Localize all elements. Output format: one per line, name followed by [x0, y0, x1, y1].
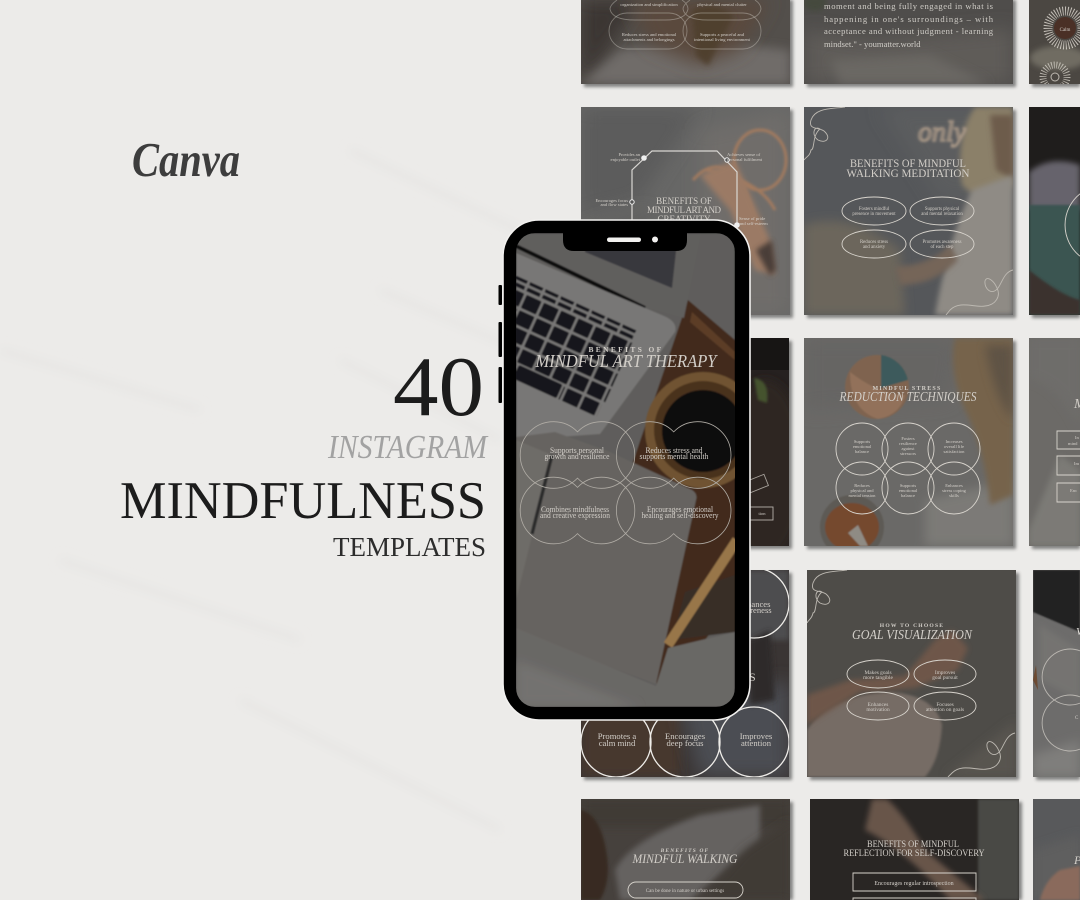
circle grid: physical and: [850, 488, 874, 493]
circle labels: [598, 599, 773, 748]
camera: [652, 236, 658, 242]
circle labels: awareness: [736, 605, 772, 615]
panel: mindful walking template: MINDFUL WALKING: [632, 851, 738, 866]
number 40: 40: [393, 340, 484, 434]
circle grid: against: [901, 446, 915, 451]
template title: BENEFITS OF MINDFUL: [850, 156, 966, 170]
circle grid: Enhances: [945, 483, 963, 488]
quote text: [824, 1, 994, 49]
panel: template row 1 middle: [803, 0, 1016, 87]
coffee mug: [645, 372, 761, 488]
ring: [1065, 194, 1080, 256]
upper pills: [610, 0, 761, 20]
circle labels: calm mind: [599, 738, 636, 748]
hand: [1040, 866, 1080, 900]
title fragment: S: [749, 670, 756, 684]
orange ribbon: [692, 128, 788, 211]
oval grid: [847, 660, 976, 720]
list boxes: mind: [1068, 441, 1078, 446]
arm: [865, 799, 985, 900]
node labels: Provides an: [618, 152, 641, 157]
circle grid: mental tension: [849, 493, 876, 498]
circle grid: resilience: [899, 441, 917, 446]
circle grid: emotional: [899, 488, 918, 493]
keyboard: [420, 250, 638, 417]
circle grid: satisfaction: [944, 449, 965, 454]
circle grid: Supports: [900, 483, 916, 488]
list boxes: Enc: [1070, 488, 1077, 493]
panel: template row 4 right: C: [1075, 716, 1079, 721]
speaker: [607, 238, 641, 242]
mindfulness title: MINDFULNESS: [120, 472, 486, 530]
benefit labels: growth and resilience: [544, 452, 610, 461]
benefit labels: Encourages emotional: [647, 505, 714, 514]
panel: template row 3 right: [1029, 338, 1080, 549]
circles: [1042, 649, 1080, 751]
list boxes: Im: [1074, 461, 1080, 466]
pillow: [615, 805, 760, 900]
circle grid: balance: [855, 449, 869, 454]
phone screen: MINDFUL ART THERAPY: [535, 351, 718, 371]
arm and hand: [807, 630, 968, 725]
panel: mindful walking template: [581, 799, 793, 900]
quote text: mindset." - youmatter.world: [824, 39, 921, 49]
circle labels: Enhances: [738, 599, 771, 609]
panel: template row 3 left: tion: [758, 511, 766, 516]
phone body: [503, 220, 750, 720]
circle grid: skills: [949, 493, 959, 498]
panel: mindful walking meditation template: [804, 107, 1016, 318]
circle grid: stressors: [900, 451, 916, 456]
oval grid: and mental relaxation: [921, 212, 963, 217]
panel: template row 5 right: [1033, 799, 1080, 900]
caption box: [750, 506, 774, 520]
leaf: [754, 378, 767, 403]
oval grid: Improves: [935, 670, 955, 676]
quote text: acceptance and without judgment - learning: [824, 26, 994, 36]
template title: CREATIVITY: [658, 214, 711, 224]
screen photo: [420, 233, 761, 707]
template title: WALKING MEDITATION: [846, 166, 970, 180]
oval grid: Makes goals: [864, 670, 892, 676]
laptop base: [516, 253, 676, 440]
template title: [844, 840, 985, 859]
circle grid: balance: [901, 493, 915, 498]
oval grid: and anxiety: [863, 245, 886, 250]
notebook: [516, 432, 696, 684]
panel: mindful walking template: Can be done in nature or urban settings: [646, 889, 724, 894]
circle labels: Improves: [740, 731, 773, 741]
node labels: personal fulfilment: [727, 157, 763, 162]
oval grid: Enhances: [868, 702, 888, 708]
pill text: attachments and belongings: [623, 37, 675, 42]
decorative squiggles: [804, 107, 1013, 315]
oval grid: Reduces stress: [860, 240, 888, 245]
circle labels: attention: [741, 738, 772, 748]
template title: MINDFUL STRESS: [873, 386, 941, 392]
node labels: Achieves sense of: [727, 152, 761, 157]
side buttons: [498, 285, 502, 403]
sun icon: [1043, 11, 1080, 89]
instagram label: INSTAGRAM: [327, 429, 488, 466]
circle grid: [836, 423, 980, 514]
pill text: intentional living environment: [694, 37, 751, 42]
circle labels: Promotes a: [598, 731, 636, 741]
template title: [846, 160, 970, 177]
mirror: [845, 355, 909, 419]
template title: BENEFITS OF MINDFUL: [867, 840, 959, 850]
node labels: and flow states: [600, 202, 628, 207]
panel: reflection template: [810, 799, 1022, 900]
oval grid: motivation: [866, 707, 890, 713]
circle grid: Supports: [854, 439, 870, 444]
benefit labels: Combines mindfulness: [541, 505, 609, 514]
node labels: and self-esteem: [739, 221, 768, 226]
wooden desk: [620, 300, 735, 700]
circle labels: deep focus: [666, 738, 704, 748]
template title: MINDFUL ART AND: [647, 205, 722, 215]
benefit labels: Reduces stress and: [646, 446, 702, 455]
panel: circles template row 4 left: [581, 568, 792, 780]
panel: template row 1 left: [581, 0, 793, 87]
calm label: Calm: [1060, 28, 1071, 33]
benefit labels: and creative expression: [540, 511, 610, 520]
circle grid: Reduces: [854, 483, 870, 488]
oval grid: attention on goals: [926, 707, 964, 713]
oval grid: of each step: [931, 245, 954, 250]
node labels: enjoyable outlet: [611, 157, 641, 162]
node labels: Sense of pride: [739, 216, 765, 221]
heading block: [120, 340, 488, 562]
pen on notebook: [532, 455, 552, 534]
phone mockup: [420, 220, 761, 720]
template title: BENEFITS OF: [660, 848, 709, 854]
phone notch: [563, 232, 687, 251]
bowl: [820, 495, 884, 546]
circle grid: emotional: [853, 444, 872, 449]
panel: goal visualization template: GOAL VISUALIZATION: [852, 628, 973, 643]
thigh: [807, 692, 942, 777]
panel: stress reduction techniques template: [804, 338, 1016, 559]
frame nodes: [630, 155, 740, 228]
lower pills: [609, 13, 687, 49]
quote text: moment and being fully engaged in what is: [824, 1, 994, 11]
screen title: BENEFITS OF: [588, 345, 664, 354]
node labels: [595, 152, 768, 226]
oval grid: [842, 197, 974, 258]
node labels: Encourages focus: [595, 198, 628, 203]
benefit labels: Supports personal: [550, 446, 605, 455]
template title: HOW TO CHOOSE: [880, 623, 944, 629]
benefit labels: [540, 446, 719, 520]
circles: [581, 568, 789, 777]
laptop lid: [516, 233, 701, 318]
dark cloth: [672, 575, 735, 640]
panel: template row 4 right: [1033, 570, 1080, 780]
oval grid: goal pursuit: [932, 675, 958, 681]
quote text: happening in one's surroundings – with: [824, 14, 994, 24]
pill text: Supports a peaceful and: [700, 32, 745, 37]
template title: [647, 198, 721, 220]
pill text: [620, 2, 751, 42]
panel: stress reduction techniques template: REDUCTION TECHNIQUES: [839, 390, 976, 405]
oval grid: Fosters mindful: [859, 207, 890, 212]
pill box: [628, 882, 743, 898]
oval grid: Focuses: [936, 702, 954, 708]
pencil: [668, 540, 737, 645]
oval grid: Promotes awareness: [922, 240, 962, 245]
circle grid: stress coping: [942, 488, 967, 493]
circle labels: Encourages: [665, 731, 706, 741]
tilted label: [750, 474, 769, 493]
phone screen: [420, 233, 761, 707]
hair: [953, 338, 1013, 505]
panel: template row 3 left: [750, 338, 794, 552]
panel: template row 1 right: [1029, 0, 1080, 89]
circle grid: Increases: [945, 439, 963, 444]
circle grid: Fosters: [901, 436, 915, 441]
laptop display: [585, 233, 678, 288]
panel: art and creativity template: [581, 107, 793, 318]
oval grid: more tangible: [863, 675, 893, 681]
circle grid: overall life: [944, 444, 964, 449]
pill text: organization and simplification: [620, 2, 678, 7]
oval grid: presence in movement: [852, 212, 896, 217]
bedding: [516, 628, 735, 707]
double-circle outlines: [520, 422, 731, 544]
list boxes: [853, 873, 976, 900]
neon sign: only: [918, 117, 967, 148]
panel: goal visualization template: [807, 570, 1019, 780]
oval grid: Supports physical: [925, 207, 960, 212]
pill text: Reduces stress and emotional: [622, 32, 677, 37]
decorative squiggles: [807, 570, 1015, 777]
benefit labels: healing and self-discovery: [642, 511, 719, 520]
octagon frame: [631, 150, 738, 228]
panel: template row 2 right: [1029, 107, 1080, 318]
template title: REFLECTION FOR SELF-DISCOVERY: [844, 849, 985, 859]
face: [581, 810, 608, 900]
pill text: physical and mental clutter: [697, 2, 747, 7]
logo: Canva: Canva: [132, 132, 240, 187]
templates label: TEMPLATES: [333, 532, 486, 562]
template title: BENEFITS OF: [656, 196, 712, 206]
list boxes: [1057, 431, 1080, 502]
panel: reflection template: Encourages regular introspection: [874, 881, 954, 887]
benefit labels: supports mental health: [640, 452, 708, 461]
list boxes: In: [1075, 435, 1080, 440]
